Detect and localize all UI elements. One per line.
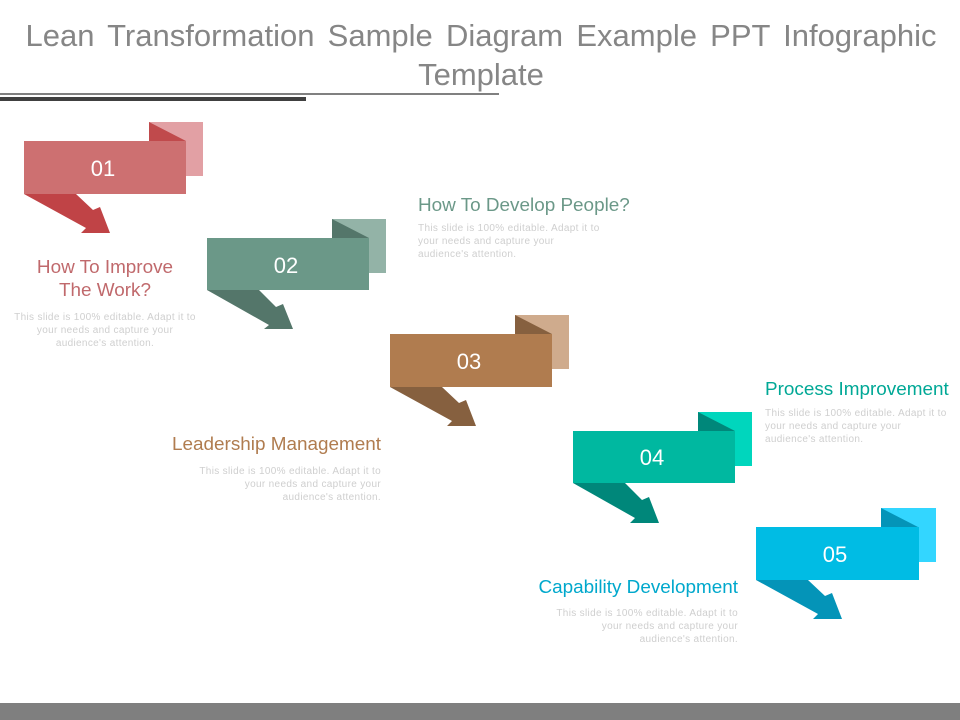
- text block: how to improve the work: How To Improve: [37, 257, 173, 278]
- text block: process improvement: This slide is 100% editable. Adapt it to: [765, 408, 947, 419]
- ribbon 04: [573, 412, 752, 523]
- text block: leadership management: Leadership Management: [172, 434, 381, 455]
- text block: how to develop people: This slide is 100% editable. Adapt it to: [418, 223, 600, 234]
- ribbon 01: 01: [91, 156, 115, 181]
- ribbon 05: 05: [823, 542, 847, 567]
- text block: how to improve the work: This slide is 100% editable. Adapt it to: [14, 312, 196, 323]
- title underline: [0, 93, 499, 101]
- text block: how to improve the work: The Work?: [59, 280, 151, 301]
- text block: how to improve the work: audience's attention.: [56, 338, 154, 349]
- text block: capability development: Capability Development: [538, 577, 738, 598]
- text block: how to improve the work: your needs and capture your: [37, 325, 173, 336]
- ribbon 02: 02: [274, 253, 298, 278]
- title: Lean Transformation Sample Diagram Example PPT Infographic: [26, 18, 936, 53]
- text block: process improvement: your needs and capture your: [765, 421, 901, 432]
- text block: how to develop people: How To Develop People?: [418, 195, 630, 216]
- text block: process improvement: audience's attention.: [765, 434, 863, 445]
- text block: leadership management: This slide is 100% editable. Adapt it to: [199, 466, 381, 477]
- title: [26, 18, 936, 92]
- ribbon 03: 03: [457, 349, 481, 374]
- text block: capability development: This slide is 100% editable. Adapt it to: [556, 608, 738, 619]
- text block: capability development: audience's attention.: [640, 634, 738, 645]
- text block: leadership management: audience's attention.: [283, 492, 381, 503]
- text block: capability development: [538, 577, 738, 645]
- text block: how to improve the work: [14, 257, 196, 349]
- title: Template: [418, 57, 544, 92]
- footer bar: [0, 703, 960, 720]
- ribbon 03: [390, 315, 569, 426]
- ribbon 02: [207, 219, 386, 329]
- ribbon 04: 04: [640, 445, 664, 470]
- text block: capability development: your needs and capture your: [602, 621, 738, 632]
- text block: process improvement: Process Improvement: [765, 379, 949, 400]
- ribbon 01: [24, 122, 203, 233]
- text block: leadership management: your needs and capture your: [245, 479, 381, 490]
- text block: how to develop people: [418, 195, 630, 260]
- ribbon 05: [756, 508, 936, 619]
- text block: process improvement: [765, 379, 949, 445]
- text block: how to develop people: audience's attention.: [418, 249, 516, 260]
- text block: how to develop people: your needs and capture your: [418, 236, 554, 247]
- text block: leadership management: [172, 434, 381, 503]
